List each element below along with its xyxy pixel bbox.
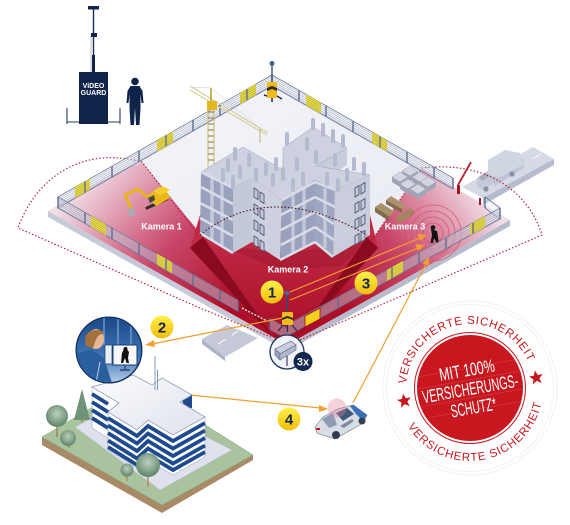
zone: camera 2 <box>190 195 378 345</box>
zone overlap right <box>298 237 378 336</box>
seal headline <box>414 351 526 427</box>
camera coverage zones on floor <box>30 162 525 345</box>
step badge 2: 2 <box>158 320 166 336</box>
shadow <box>212 242 368 270</box>
trailer label <box>81 83 106 97</box>
3x badge: 3x <box>297 356 310 368</box>
camera mast rear <box>264 61 282 102</box>
warning panels front <box>91 216 485 281</box>
arrow police to intruder <box>353 257 429 403</box>
monitors <box>105 345 137 370</box>
front facade <box>108 412 205 475</box>
warning panels rear <box>75 84 387 198</box>
right face with windows <box>333 175 370 257</box>
arrow 3 <box>290 244 425 300</box>
person silhouette for scale <box>126 78 144 125</box>
siren rings <box>328 398 346 418</box>
insurance seal <box>382 300 558 476</box>
office on green ground <box>42 356 253 513</box>
site sign <box>305 308 320 327</box>
roof <box>201 127 370 200</box>
control room circle <box>76 317 142 383</box>
front trees <box>120 453 160 487</box>
seal text top: VERSICHERTE SICHERHEIT <box>398 316 536 383</box>
roof columns <box>223 120 364 190</box>
right open face <box>315 182 335 257</box>
step badge 1: 1 <box>268 284 276 302</box>
rear trees <box>46 389 90 448</box>
alarm rings and intruder <box>405 205 461 261</box>
signal arrows <box>145 234 429 412</box>
sliding gate <box>242 308 267 321</box>
rear fences <box>58 75 453 208</box>
excavator <box>125 186 170 216</box>
arrow 2 to control room <box>145 318 282 347</box>
front fences <box>58 197 500 339</box>
site platform <box>48 82 510 351</box>
police car <box>315 398 367 439</box>
step badge 1 <box>260 280 284 304</box>
rear right wing facade <box>182 394 192 408</box>
tower crane <box>190 86 268 167</box>
centre open face <box>280 182 315 260</box>
left wing open face <box>200 172 233 253</box>
seal headline: SCHUTZ* <box>449 394 498 422</box>
roof antenna <box>155 356 158 390</box>
seal text bottom: VERSICHERTE SICHERHEIT <box>410 402 541 461</box>
entry gate <box>457 162 481 205</box>
left wing facade <box>92 387 119 438</box>
dotted arc camera 2 <box>200 207 367 235</box>
zone overlap left <box>190 237 273 337</box>
step badge 3: 3 <box>362 276 370 292</box>
cross shaped roof <box>92 375 205 435</box>
ground <box>42 392 253 513</box>
building under construction <box>200 120 370 270</box>
step badge 4: 4 <box>285 412 294 428</box>
seal headline: MIT 100% <box>438 356 496 385</box>
red centre disc <box>414 332 526 444</box>
front camera mast <box>278 290 297 332</box>
dotted coverage outlines <box>18 158 542 340</box>
step badge 4 <box>278 408 300 430</box>
arrow 4 to police car <box>190 395 328 412</box>
zone: camera 1 <box>48 162 278 338</box>
arrow 1 to camera 3 area <box>290 234 427 292</box>
camera labels: Kamera 1 <box>141 222 182 232</box>
upper tower faces <box>283 148 315 185</box>
camera labels: Kamera 2 <box>268 264 308 274</box>
trailer label: GUARD <box>81 90 106 97</box>
right road with truck <box>462 147 554 205</box>
camera labels <box>141 222 425 274</box>
stacked pallets <box>392 166 436 199</box>
timber stacks <box>375 196 415 223</box>
camera icon badge <box>270 335 312 371</box>
seal stars <box>396 369 544 408</box>
trailer: Video Guard mast unit <box>67 6 120 124</box>
camera labels: Kamera 3 <box>385 222 425 232</box>
operator <box>76 329 112 383</box>
trailer label: ViDEO <box>83 83 105 90</box>
front road <box>202 325 258 361</box>
zone: camera 3 <box>295 168 510 338</box>
intruder <box>430 225 439 243</box>
plain face with windows <box>233 178 282 260</box>
step badge 2 <box>150 316 174 338</box>
truck <box>477 150 524 192</box>
step badge 3 <box>354 272 378 294</box>
